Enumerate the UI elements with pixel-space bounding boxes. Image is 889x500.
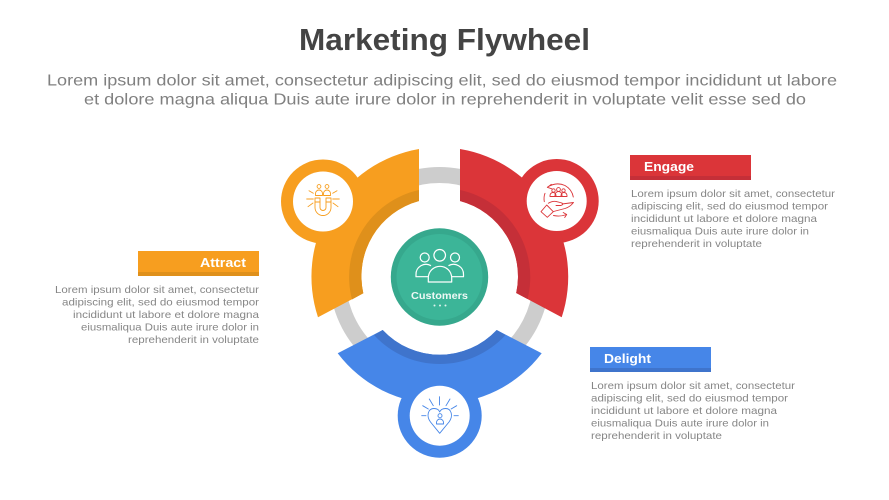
- icon: customers group: [416, 250, 464, 282]
- text block: attract: Lorem ipsum dolor sit amet, consectetur: [55, 284, 260, 296]
- text block: attract: incididunt ut labore et dolore magna: [73, 309, 259, 321]
- text block: delight: Lorem ipsum dolor sit amet, consectetur: [591, 380, 796, 392]
- segment: delight: [338, 330, 542, 458]
- text block: delight: reprehenderit in voluptate: [591, 430, 722, 442]
- three dots: [434, 304, 446, 306]
- text block: attract: reprehenderit in voluptate: [128, 334, 259, 346]
- text block: delight: [591, 380, 796, 442]
- label bar: attract: Attract: [200, 255, 247, 270]
- label bar: engage: Engage: [644, 159, 694, 174]
- text block: attract: adipiscing elit, sed do eiusmod tempor: [62, 296, 260, 308]
- icon: magnet attracting people: [307, 185, 339, 216]
- label: customers: Customers: [411, 290, 468, 302]
- text block: engage: [631, 188, 836, 250]
- text block: delight: adipiscing elit, sed do eiusmod tempor: [591, 392, 789, 404]
- icon: heart with person and rays: [422, 397, 458, 433]
- subtitle text: Lorem ipsum dolor sit amet, consectetur adipiscing elit, sed do eiusmod tempor incididunt ut labore: [47, 72, 837, 90]
- text block: engage: reprehenderit in voluptate: [631, 238, 762, 250]
- label bar: delight: [590, 347, 711, 372]
- text block: delight: incididunt ut labore et dolore magna: [591, 405, 777, 417]
- text block: attract: [55, 284, 260, 346]
- label bar: attract: [138, 251, 259, 276]
- text block: engage: adipiscing elit, sed do eiusmod tempor: [631, 200, 829, 212]
- subtitle text: [47, 72, 837, 108]
- segment: attract: [281, 149, 419, 317]
- text block: engage: incididunt ut labore et dolore magna: [631, 213, 817, 225]
- text block: delight: eiusmaliqua Duis aute irure dolor in: [591, 418, 769, 430]
- label bar: engage: [630, 155, 751, 180]
- title: Marketing Flywheel: [299, 22, 590, 57]
- grey flywheel ring: [338, 175, 542, 379]
- text block: engage: Lorem ipsum dolor sit amet, consectetur: [631, 188, 836, 200]
- subtitle text: et dolore magna aliqua Duis aute irure dolor in reprehenderit in voluptate velit esse sed do: [84, 92, 806, 108]
- center hub: customers: [391, 228, 488, 326]
- segment: engage: [460, 149, 599, 317]
- text block: attract: eiusmaliqua Duis aute irure dolor in: [81, 322, 259, 334]
- icon: hand holding people with cycle arrows: [541, 184, 574, 218]
- label bar: delight: Delight: [604, 351, 652, 366]
- text block: engage: eiusmaliqua Duis aute irure dolor in: [631, 226, 809, 238]
